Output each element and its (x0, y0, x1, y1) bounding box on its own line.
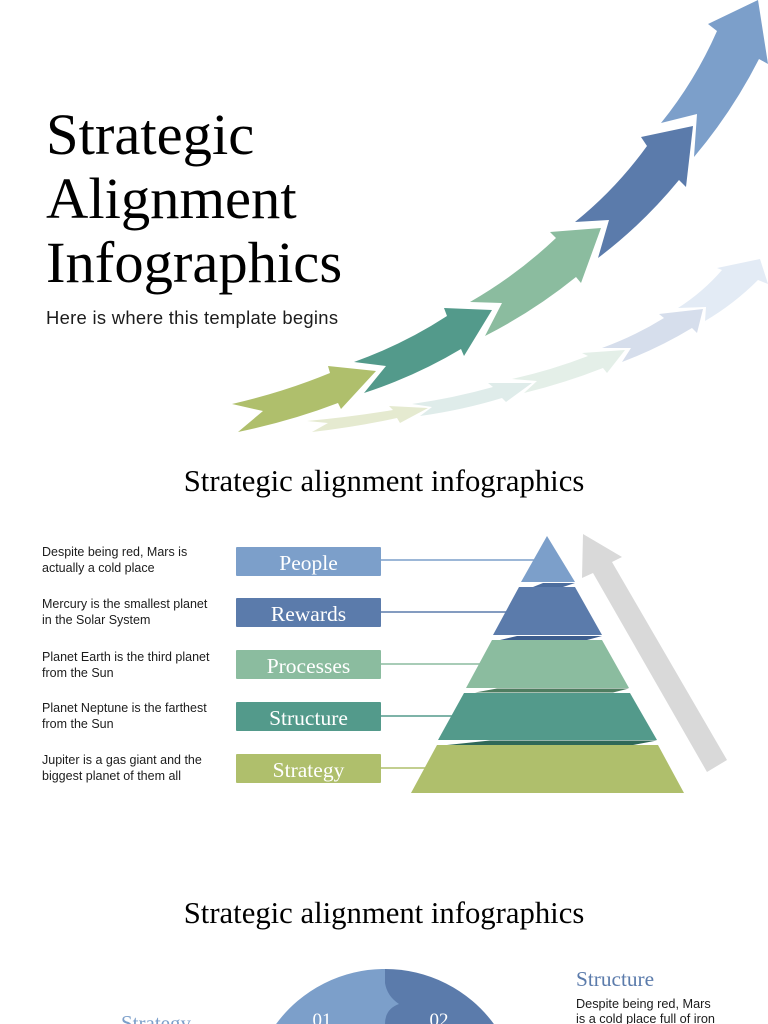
pyramid layer: Strategy (411, 745, 684, 793)
text: Earth: Planet Earth is the third planet (42, 650, 209, 664)
text: Mercury (42, 597, 208, 626)
arrow: light green (470, 228, 601, 336)
pyramid layer: Rewards (493, 587, 602, 635)
text: Mars: Despite being red, Mars is (42, 545, 187, 559)
grey arrow (582, 534, 727, 772)
pyramid band shadows (533, 583, 575, 587)
text: Neptune (42, 701, 207, 730)
arrow: teal (354, 308, 492, 393)
segment 01 (276, 969, 399, 1024)
arrow: light blue (661, 0, 768, 157)
title: Infographics (46, 230, 342, 295)
subtitle: Here is where this template begins (46, 307, 338, 328)
heading: circle section: Strategic alignment infographics (184, 896, 584, 930)
title (46, 102, 342, 295)
pyramid layer: People (521, 536, 575, 582)
text: Earth (42, 650, 210, 680)
label: Rewards: Rewards (271, 602, 346, 626)
growth arrows (232, 0, 768, 432)
text: Jupiter (42, 753, 202, 782)
text: Mercury: Mercury is the smallest planet (42, 597, 207, 611)
text: Jupiter: biggest planet of them all (42, 768, 181, 782)
pyramid layer: Structure (438, 693, 657, 740)
label: People (236, 547, 381, 576)
text: Neptune: from the Sun (42, 716, 114, 730)
label: Rewards (236, 598, 381, 627)
title: Alignment (46, 166, 297, 231)
label: Structure: Structure (576, 967, 654, 991)
text: Mercury: in the Solar System (42, 612, 150, 626)
label: Processes (236, 650, 381, 679)
label: Structure (236, 702, 381, 731)
arrow: dark blue (575, 126, 693, 258)
text: Earth: from the Sun (42, 666, 114, 680)
heading: pyramid section: Strategic alignment infographics (184, 464, 584, 498)
text: Neptune: Planet Neptune is the farthest (42, 701, 207, 715)
text: Mars: actually a cold place (42, 560, 155, 574)
text: Jupiter: Jupiter is a gas giant and the (42, 753, 202, 767)
pyramid layer: Processes (466, 640, 629, 688)
label: Processes: Processes (267, 654, 350, 678)
segment 02 (385, 969, 494, 1024)
label: People: People (279, 551, 338, 575)
title: Strategic (46, 102, 254, 167)
faded arrows (307, 259, 768, 432)
label: Structure: Structure (269, 706, 348, 730)
label: Strategy (236, 754, 381, 783)
arrow: green-yellow (232, 366, 376, 432)
text: Structure description (576, 997, 715, 1024)
label: Strategy: Strategy (273, 758, 344, 782)
text: Mars (42, 545, 187, 574)
text: Structure description: Despite being red, Mars (576, 997, 711, 1011)
